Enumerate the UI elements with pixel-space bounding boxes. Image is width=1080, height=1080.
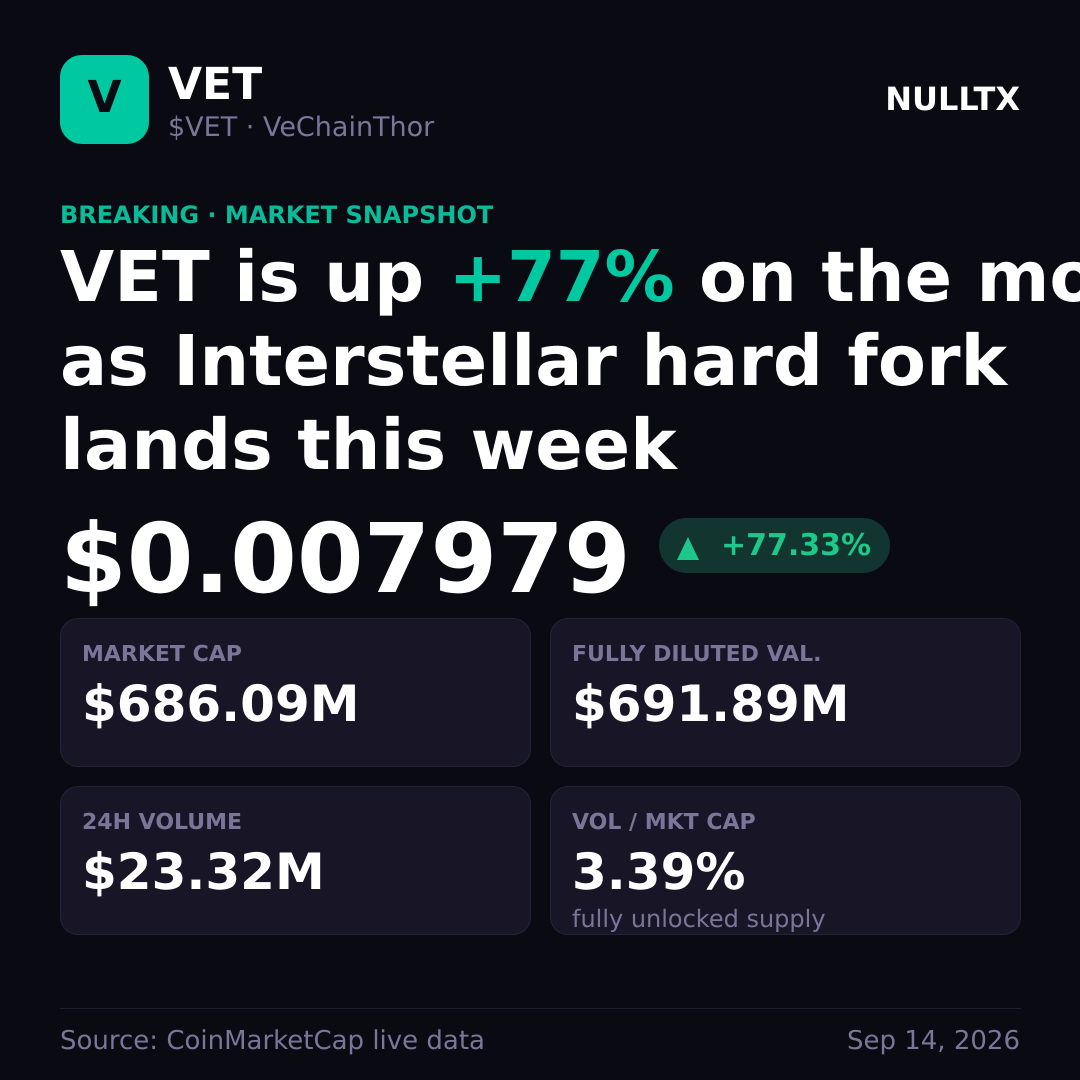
headline <box>60 236 1080 486</box>
ticker name: VET <box>168 59 262 110</box>
ratio label: VOL / MKT CAP <box>572 810 756 835</box>
ratio note: fully unlocked supply <box>572 905 826 933</box>
volume label: 24H VOLUME <box>82 810 242 835</box>
FDV value: $691.89M <box>572 675 850 733</box>
source note: Source: CoinMarketCap live data <box>60 1026 485 1056</box>
headline: as Interstellar hard fork <box>60 320 1007 402</box>
card: volume to market cap <box>550 786 1021 935</box>
card: fully diluted valuation <box>550 618 1021 767</box>
market cap label: MARKET CAP <box>82 642 242 667</box>
logo badge: V <box>87 72 122 123</box>
ratio value: 3.39% <box>572 843 745 901</box>
volume value: $23.32M <box>82 843 325 901</box>
change pill <box>659 518 890 573</box>
headline: lands this week <box>60 404 677 486</box>
change value: +77.33% <box>721 528 871 563</box>
card: 24h volume <box>60 786 531 935</box>
card: market cap <box>60 618 531 767</box>
logo badge <box>60 55 149 144</box>
FDV label: FULLY DILUTED VAL. <box>572 642 822 667</box>
eyebrow label: BREAKING · MARKET SNAPSHOT <box>60 201 493 229</box>
ticker subtitle: $VET · VeChainThor <box>168 112 434 143</box>
price: $0.007979 <box>60 503 631 615</box>
up triangle icon <box>677 537 699 560</box>
brand wordmark: NULLTX <box>885 80 1020 118</box>
date: Sep 14, 2026 <box>847 1026 1020 1056</box>
market cap value: $686.09M <box>82 675 360 733</box>
footer rule <box>60 1008 1021 1009</box>
